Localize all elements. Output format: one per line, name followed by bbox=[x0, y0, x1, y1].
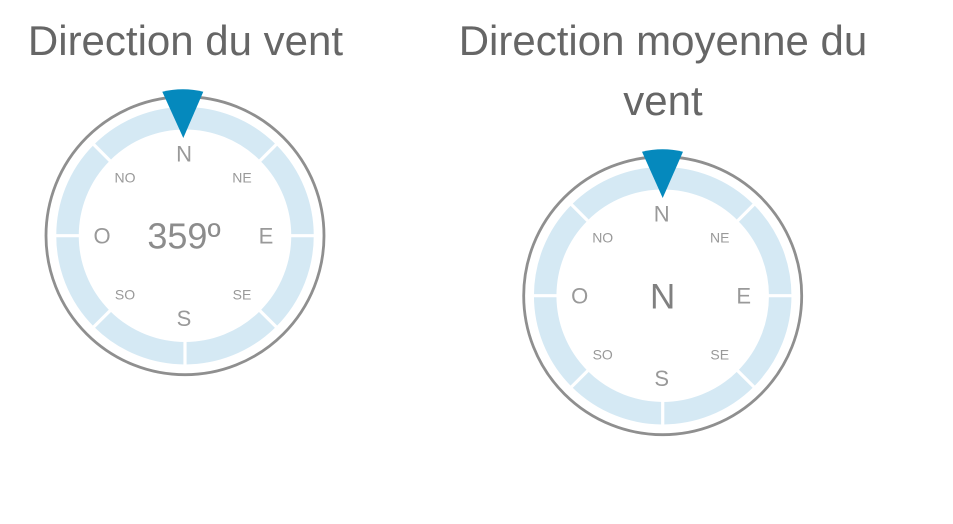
heading: direction du vent: Direction du vent bbox=[28, 17, 343, 64]
intercardinal labels: NO bbox=[592, 230, 613, 246]
icon: direction pointer bbox=[162, 89, 203, 138]
heading: direction moyenne du vent: vent bbox=[623, 77, 703, 124]
intercardinal labels: SE bbox=[710, 347, 729, 363]
cardinal labels: N bbox=[654, 202, 670, 227]
panel: average wind direction compass bbox=[524, 149, 802, 435]
cardinal labels bbox=[571, 202, 751, 391]
heading: direction moyenne du vent: Direction moyenne du bbox=[459, 17, 867, 64]
compass light blue band bbox=[54, 105, 316, 367]
value: 359 degrees: 359º bbox=[147, 216, 221, 257]
cardinal labels bbox=[93, 142, 273, 331]
intercardinal labels: NE bbox=[232, 170, 252, 186]
cardinal labels: O bbox=[93, 224, 111, 249]
compass outer ring bbox=[524, 157, 802, 435]
cardinal labels: E bbox=[736, 284, 751, 309]
compass outer ring bbox=[46, 97, 324, 375]
intercardinal labels: SE bbox=[233, 287, 251, 303]
intercardinal labels: NE bbox=[710, 230, 729, 246]
cardinal labels: S bbox=[654, 366, 669, 391]
intercardinal labels bbox=[114, 170, 252, 303]
value: north: N bbox=[650, 278, 675, 317]
heading: direction moyenne du vent bbox=[459, 17, 867, 124]
cardinal labels: E bbox=[259, 224, 273, 249]
icon: direction pointer bbox=[642, 149, 683, 198]
panel: wind direction compass bbox=[46, 89, 324, 375]
intercardinal labels bbox=[592, 230, 729, 363]
intercardinal labels: NO bbox=[114, 170, 136, 186]
intercardinal labels: SO bbox=[115, 287, 135, 303]
intercardinal labels: SO bbox=[593, 347, 613, 363]
cardinal labels: S bbox=[177, 306, 191, 331]
cardinal labels: O bbox=[571, 284, 588, 309]
cardinal labels: N bbox=[176, 142, 192, 167]
compass light blue band bbox=[532, 165, 794, 427]
